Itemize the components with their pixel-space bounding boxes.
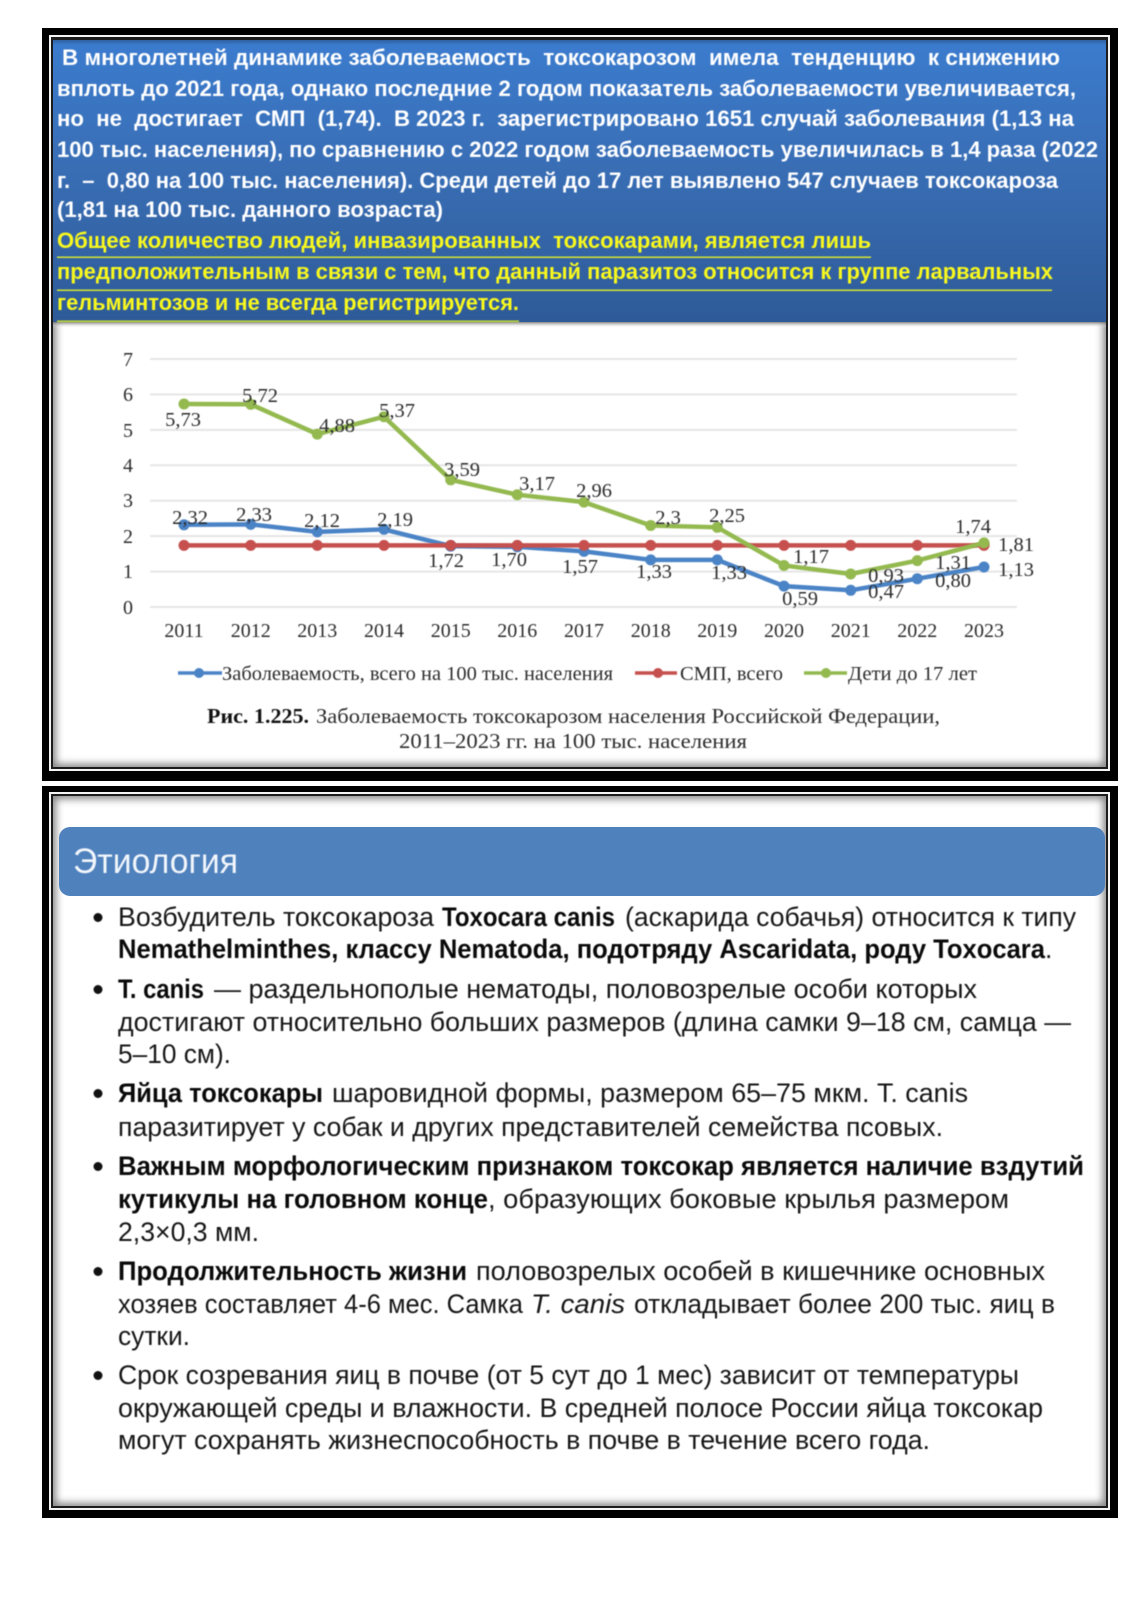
x axis labels bbox=[164, 620, 1004, 642]
white statistics paragraph bbox=[57, 45, 1098, 222]
y axis labels bbox=[123, 349, 133, 619]
bullet: lifespan: Продолжительность жизни bbox=[118, 1256, 467, 1286]
x axis labels: 2012 bbox=[231, 620, 271, 642]
y axis labels: 3 bbox=[123, 490, 133, 512]
white statistics paragraph: г. – 0,80 на 100 тыс. населения). Среди детей до 17 лет выявлено 547 случаев токсокароза bbox=[57, 168, 1058, 193]
data value labels: 1,13 bbox=[998, 559, 1034, 581]
x axis labels: 2023 bbox=[964, 620, 1004, 642]
bullet: causative agent bbox=[94, 902, 1077, 964]
white statistics paragraph: но не достигает СМП (1,74). В 2023 г. зарегистрировано 1651 случай заболевания (1,13 на bbox=[57, 106, 1074, 131]
data value labels: 1,72 bbox=[428, 550, 464, 572]
x axis labels: 2011 bbox=[164, 620, 204, 642]
white statistics paragraph: вплоть до 2021 года, однако последние 2 годом показатель заболеваемости увеличивается, bbox=[57, 76, 1076, 101]
bullet: eggs: Яйца токсокары bbox=[118, 1078, 323, 1108]
line chart: incidence 2011-2023 bbox=[123, 349, 1034, 685]
y axis labels: 4 bbox=[123, 455, 133, 477]
y axis labels: 5 bbox=[123, 420, 133, 442]
yellow underlined note: Общее количество людей, инвазированных токсокарами, является лишь bbox=[57, 228, 871, 253]
bullet: eggs: шаровидной формы, размером 65–75 мкм. T. canis bbox=[332, 1078, 968, 1108]
chart legend: СМП, всего bbox=[680, 664, 783, 685]
x axis labels: 2016 bbox=[497, 620, 537, 642]
figure caption: Рис. 1.225. bbox=[207, 704, 309, 728]
bullet: egg maturation bbox=[94, 1360, 1043, 1455]
x axis labels: 2020 bbox=[764, 620, 804, 642]
blue text banner bbox=[53, 40, 1106, 328]
panel: incidence text and chart bbox=[42, 28, 1118, 781]
bullet: lifespan: T. canis bbox=[531, 1289, 625, 1319]
chart legend: Дети до 17 лет bbox=[848, 664, 978, 685]
bullet: egg maturation: могут сохранять жизнеспособность в почве в течение всего года. bbox=[118, 1425, 930, 1455]
yellow underlined note: предположительным в связи с тем, что данный паразитоз относится к группе ларвальных bbox=[57, 259, 1053, 284]
data value labels: 1,17 bbox=[793, 546, 829, 568]
panel: etiology bbox=[42, 786, 1118, 1518]
heading bar: Этиология: Этиология bbox=[73, 842, 238, 881]
bullet: morphology: кутикулы на головном конце bbox=[118, 1184, 488, 1214]
data value labels: 1,57 bbox=[562, 556, 598, 578]
x axis labels: 2013 bbox=[297, 620, 337, 642]
bullet: T. canis size: T. canis bbox=[118, 974, 204, 1004]
y axis labels: 7 bbox=[123, 349, 133, 371]
data value labels: 0,80 bbox=[935, 570, 971, 592]
bullet: eggs: паразитирует у собак и других представителей семейства псовых. bbox=[118, 1112, 943, 1142]
blue series: total incidence bbox=[178, 519, 990, 596]
bullet: causative agent: Nemathelminthes, классу Nematoda, подотряду Ascaridata, роду Toxocara bbox=[118, 934, 1045, 964]
x axis labels: 2015 bbox=[431, 620, 471, 642]
x axis labels: 2018 bbox=[631, 620, 671, 642]
x axis labels: 2014 bbox=[364, 620, 404, 642]
figure caption bbox=[207, 704, 940, 753]
figure caption: Заболеваемость токсокарозом населения Российской Федерации, bbox=[316, 704, 940, 728]
data value labels: 1,74 bbox=[955, 516, 991, 538]
bullet: causative agent: (аскарида собачья) относится к типу bbox=[625, 902, 1077, 932]
x axis labels: 2017 bbox=[564, 620, 604, 642]
bullet: lifespan: откладывает более 200 тыс. яиц в bbox=[634, 1289, 1055, 1319]
data value labels: 5,72 bbox=[242, 385, 278, 407]
bullet: T. canis size: — раздельнополые нематоды, половозрелые особи которых bbox=[214, 974, 977, 1004]
data value labels: 0,47 bbox=[868, 581, 904, 603]
x axis labels: 2022 bbox=[897, 620, 937, 642]
data value labels: 1,81 bbox=[998, 534, 1034, 556]
yellow underlined note: гельминтозов и не всегда регистрируется. bbox=[57, 290, 519, 315]
data value labels: 4,88 bbox=[319, 415, 355, 437]
bullet: eggs bbox=[94, 1078, 968, 1142]
y axis labels: 6 bbox=[123, 384, 133, 406]
bullet: lifespan: сутки. bbox=[118, 1321, 190, 1351]
bullet: egg maturation: окружающей среды и влажности. В средней полосе России яйца токсокар bbox=[118, 1393, 1043, 1423]
bullet: T. canis size bbox=[94, 974, 1072, 1069]
figure caption: 2011–2023 гг. на 100 тыс. населения bbox=[399, 729, 747, 753]
data value labels: 3,59 bbox=[444, 459, 480, 481]
data value labels: 1,33 bbox=[711, 562, 747, 584]
red series: SMP bbox=[178, 540, 990, 551]
data value labels: 2,12 bbox=[304, 510, 340, 532]
x axis labels: 2021 bbox=[831, 620, 871, 642]
bullet: lifespan: хозяев составляет 4-6 мес. Самка bbox=[118, 1289, 523, 1319]
data value labels: 0,59 bbox=[782, 588, 818, 610]
data value labels: 2,25 bbox=[709, 505, 745, 527]
bullet: causative agent: . bbox=[1045, 934, 1052, 964]
data value labels: 2,96 bbox=[576, 480, 612, 502]
bullet: T. canis size: 5–10 см). bbox=[118, 1039, 231, 1069]
bullet: egg maturation: Срок созревания яиц в почве (от 5 сут до 1 мес) зависит от температуры bbox=[118, 1360, 1019, 1390]
data value labels: 5,73 bbox=[165, 409, 201, 431]
yellow underlined note bbox=[57, 228, 1053, 322]
bullet: morphology: , образующих боковые крылья размером bbox=[488, 1184, 1009, 1214]
y axis labels: 0 bbox=[123, 597, 133, 619]
bullet: T. canis size: достигают относительно больших размеров (длина самки 9–18 см, самца — bbox=[118, 1007, 1072, 1037]
chart legend bbox=[178, 664, 978, 685]
heading bar: Этиология bbox=[59, 827, 1105, 896]
data value labels: 0,93 bbox=[868, 565, 904, 587]
bullet: lifespan: половозрелых особей в кишечнике основных bbox=[476, 1256, 1045, 1286]
data value labels: 2,32 bbox=[172, 507, 208, 529]
white statistics paragraph: 100 тыс. населения), по сравнению с 2022 годом заболеваемость увеличилась в 1,4 раза (2022 bbox=[57, 137, 1098, 162]
data value labels bbox=[165, 385, 1034, 610]
bullet: causative agent: Возбудитель токсокароза bbox=[118, 902, 434, 932]
data value labels: 2,19 bbox=[377, 509, 413, 531]
data value labels: 1,31 bbox=[935, 552, 971, 574]
data value labels: 3,17 bbox=[519, 473, 555, 495]
white statistics paragraph: В многолетней динамике заболеваемость токсокарозом имела тенденцию к снижению bbox=[62, 45, 1060, 70]
data value labels: 2,3 bbox=[655, 507, 681, 529]
bullet: lifespan bbox=[94, 1256, 1055, 1351]
chart legend: Заболеваемость, всего на 100 тыс. населения bbox=[222, 664, 613, 685]
x axis labels: 2019 bbox=[697, 620, 737, 642]
data value labels: 1,70 bbox=[491, 549, 527, 571]
white statistics paragraph: (1,81 на 100 тыс. данного возраста) bbox=[57, 197, 443, 222]
y axis labels: 2 bbox=[123, 526, 133, 548]
data value labels: 5,37 bbox=[379, 400, 415, 422]
bullet: morphology: 2,3×0,3 мм. bbox=[118, 1217, 259, 1247]
bullet: morphology bbox=[94, 1151, 1084, 1247]
bullet: causative agent: Toxocara canis bbox=[442, 902, 615, 932]
y axis labels: 1 bbox=[123, 561, 133, 583]
bullet list bbox=[94, 902, 1084, 1455]
data value labels: 1,33 bbox=[636, 561, 672, 583]
data value labels: 2,33 bbox=[236, 504, 272, 526]
bullet: morphology: Важным морфологическим признаком токсокар является наличие вздутий bbox=[118, 1151, 1084, 1181]
green series: children under 17 bbox=[178, 398, 990, 580]
